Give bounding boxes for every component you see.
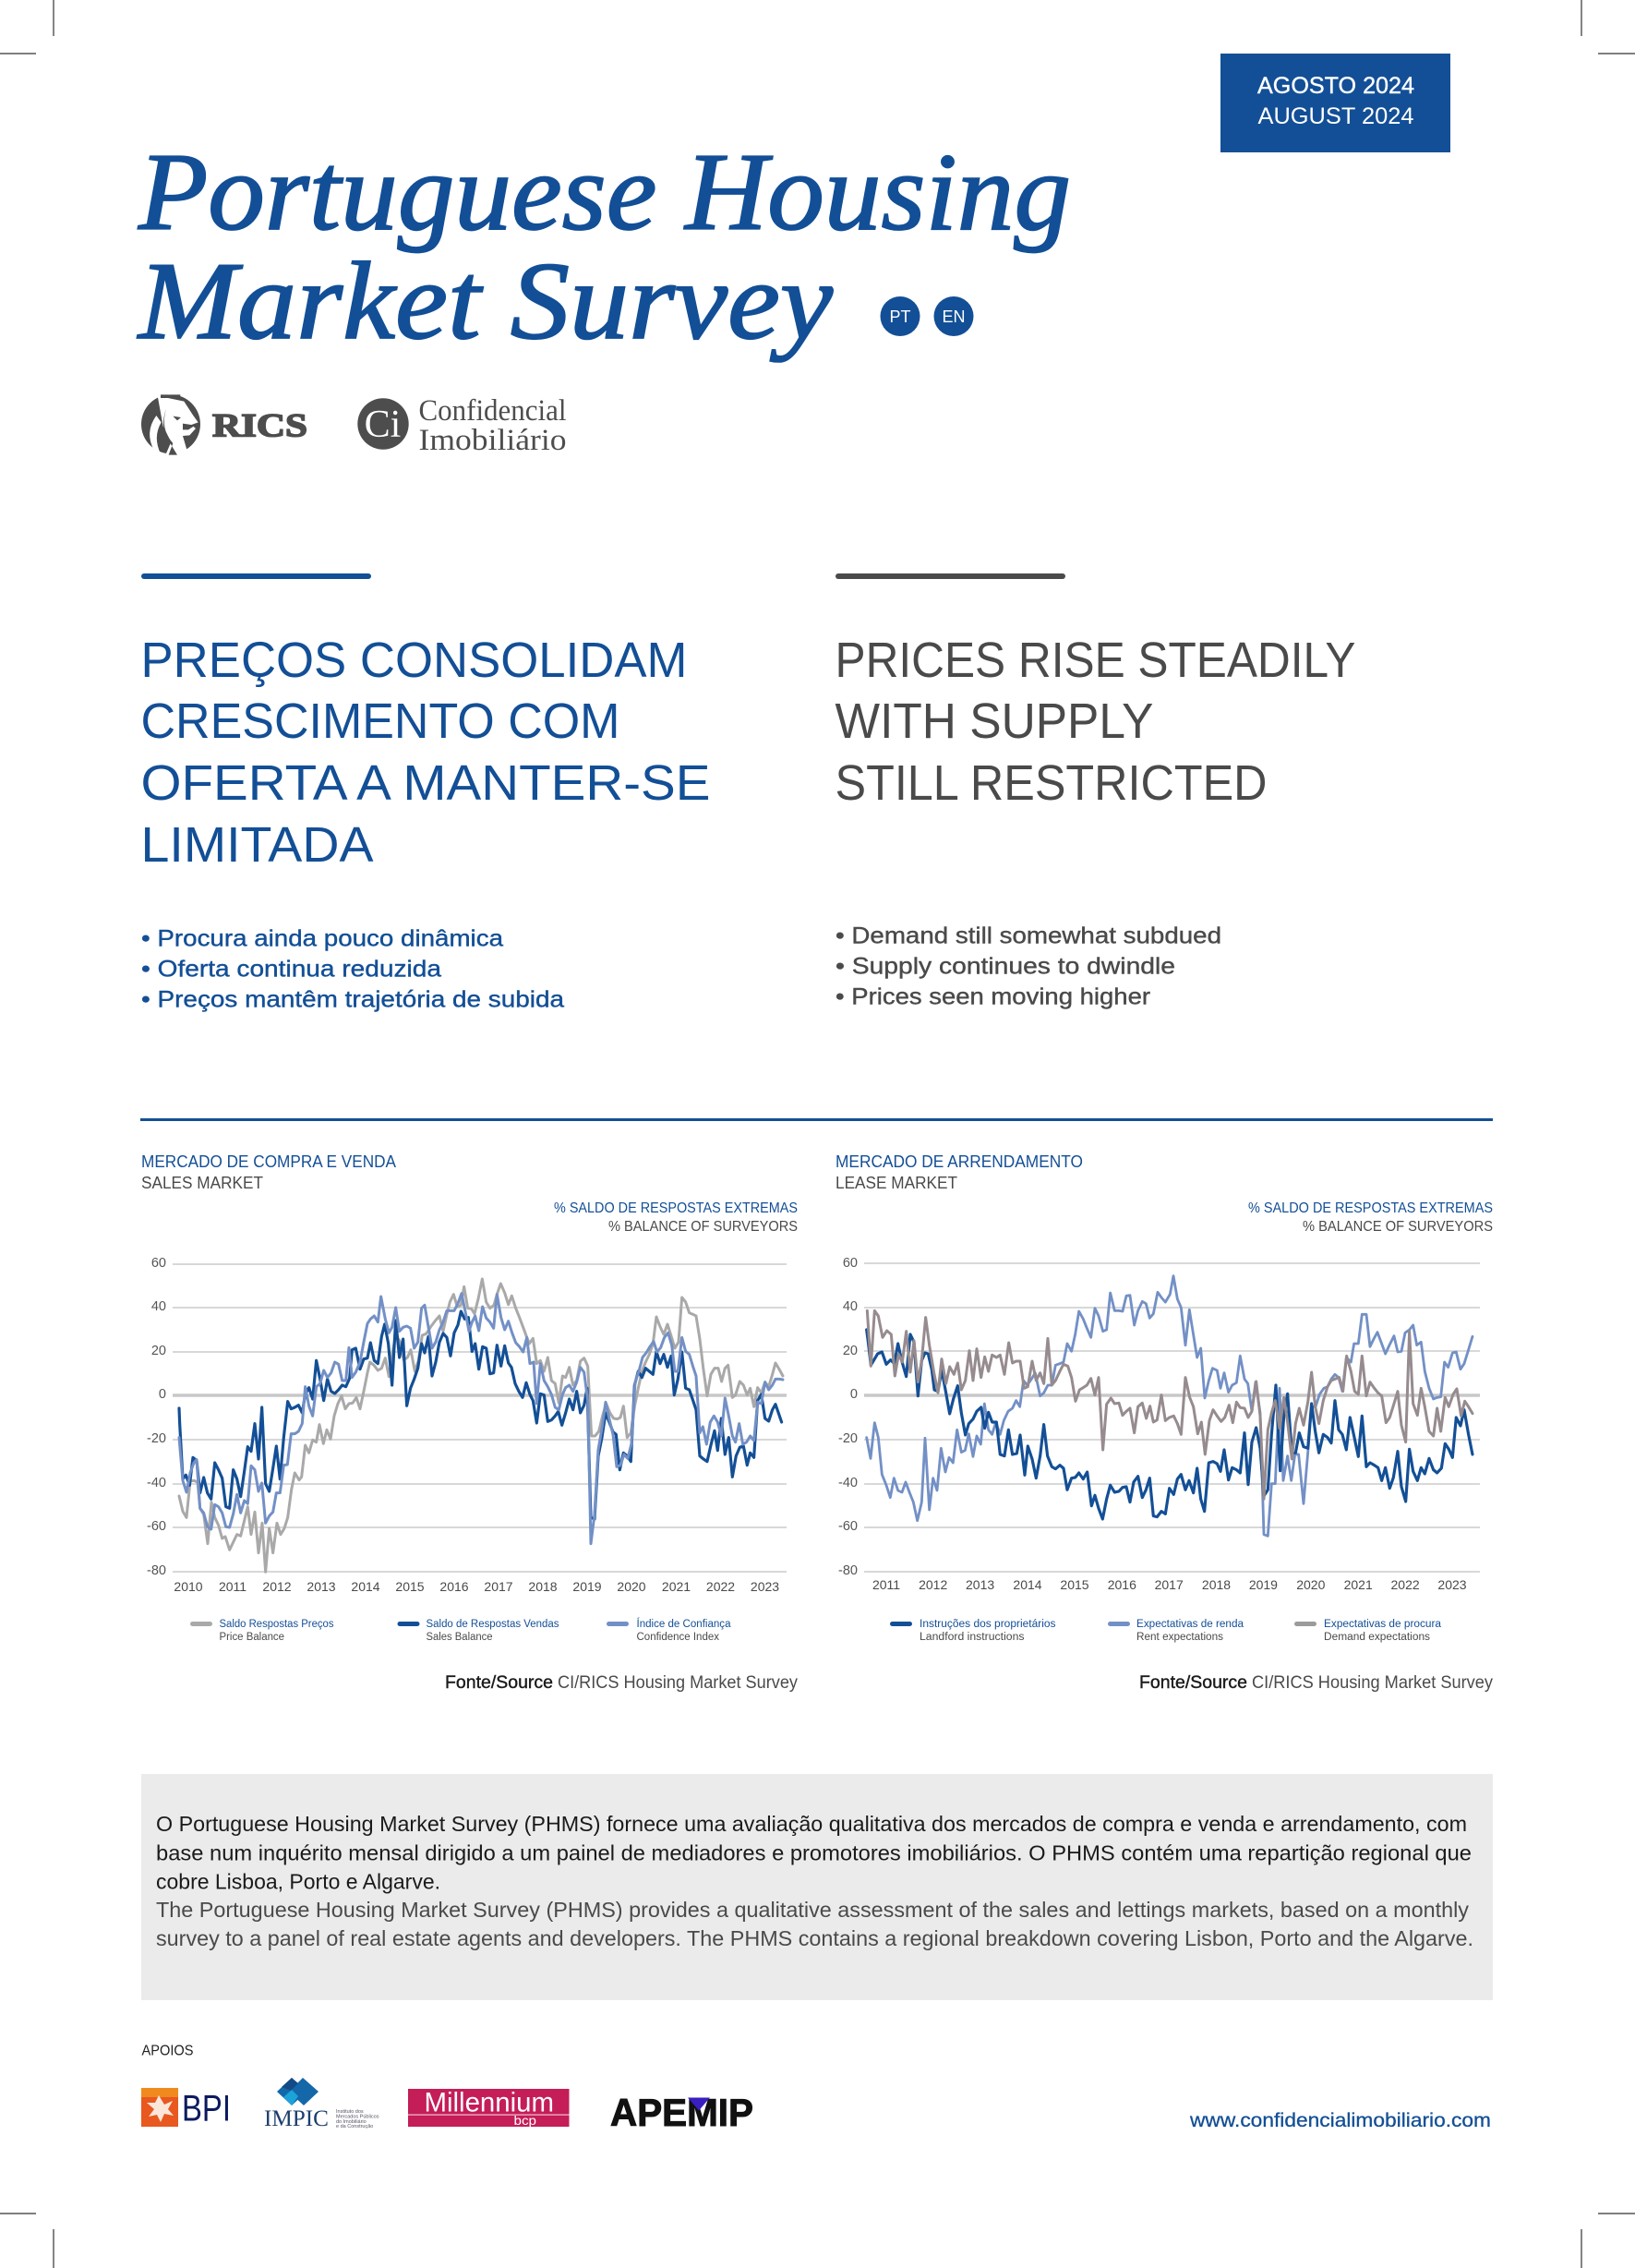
lease chart legend: Expectativas de renda xyxy=(1136,1619,1244,1630)
headline: English: PRICES RISE STEADILY xyxy=(835,633,1355,688)
lease chart source xyxy=(1139,1673,1493,1693)
date badge: AUGUST 2024 xyxy=(1257,103,1414,129)
sales chart legend: Sales Balance xyxy=(427,1632,493,1643)
sales chart legend xyxy=(190,1618,731,1643)
sales x axis labels: 2016 xyxy=(439,1579,469,1594)
headline: English: WITH SUPPLY xyxy=(835,694,1154,749)
logo: APEMIP: APEMIP xyxy=(610,2091,753,2134)
title: Market Survey xyxy=(137,239,834,362)
sales chart source: CI/RICS Housing Market Survey xyxy=(558,1673,798,1693)
logo: BPI: BPI xyxy=(182,2089,231,2129)
sales chart heading: MERCADO DE COMPRA E VENDA xyxy=(141,1152,396,1171)
lease chart legend: Landford instructions xyxy=(920,1632,1025,1643)
headline: Portuguese: OFERTA A MANTER-SE xyxy=(140,755,711,811)
logo: Confidencial Imobiliario xyxy=(357,394,567,457)
lease x axis labels: 2013 xyxy=(966,1577,994,1592)
sales chart unit note: % SALDO DE RESPOSTAS EXTREMAS xyxy=(554,1200,798,1216)
bullet list: English: • Supply continues to dwindle xyxy=(836,953,1175,979)
lease x axis labels: 2012 xyxy=(919,1577,947,1592)
sales y axis labels: -80 xyxy=(147,1563,166,1578)
sales chart legend: Índice de Confiança xyxy=(637,1618,731,1630)
bullet list: Portuguese: • Preços mantêm trajetória de subida xyxy=(141,986,564,1012)
logo: IMPIC: e da Construção xyxy=(336,2124,373,2129)
bullet list: Portuguese: • Procura ainda pouco dinâmica xyxy=(141,925,503,951)
sales y axis labels: 0 xyxy=(159,1387,166,1402)
lease y axis labels: 40 xyxy=(843,1299,858,1314)
lease x axis labels: 2011 xyxy=(872,1577,900,1592)
accent bar: Portuguese column xyxy=(141,573,371,579)
sales x axis labels: 2021 xyxy=(662,1579,691,1594)
sales chart source xyxy=(445,1673,798,1693)
lease y axis labels: 20 xyxy=(843,1344,858,1358)
headline: Portuguese: PREÇOS CONSOLIDAM xyxy=(140,633,687,688)
sales y axis labels: -40 xyxy=(147,1476,166,1490)
lease x axis labels: 2015 xyxy=(1060,1577,1089,1592)
logo: Confidencial Imobiliario: Confidencial xyxy=(419,394,567,428)
headline: Portuguese xyxy=(140,633,711,873)
lease chart legend: Instruções dos proprietários xyxy=(920,1619,1056,1630)
lease chart heading xyxy=(836,1152,1083,1192)
website url: www.confidencialimobiliario.com xyxy=(1189,2110,1491,2131)
sales x axis labels: 2017 xyxy=(484,1579,513,1594)
sales chart heading: SALES MARKET xyxy=(141,1174,263,1192)
logo: RICS: RICS xyxy=(212,406,307,443)
line: rent expectations xyxy=(867,1276,1473,1536)
logo: Confidencial Imobiliario: Ci xyxy=(365,404,401,446)
lease chart legend: Rent expectations xyxy=(1136,1632,1223,1643)
bullet list: Portuguese: • Oferta continua reduzida xyxy=(141,957,441,983)
sales chart unit note xyxy=(554,1200,798,1235)
lease chart unit note xyxy=(1248,1200,1493,1235)
sales x axis labels: 2012 xyxy=(262,1579,292,1594)
sales y axis labels xyxy=(147,1256,166,1578)
sales x axis labels xyxy=(174,1579,779,1594)
sales chart legend: Price Balance xyxy=(220,1632,284,1643)
lease y axis labels xyxy=(838,1256,858,1578)
description text: Portuguese xyxy=(156,1812,1472,1893)
sales y axis labels: -60 xyxy=(147,1519,166,1534)
sales x axis labels: 2022 xyxy=(706,1579,735,1594)
logo: IMPIC: IMPIC xyxy=(264,2106,329,2131)
lease chart source: Fonte/Source xyxy=(1139,1673,1247,1693)
lease x axis labels: 2018 xyxy=(1202,1577,1231,1592)
line: sales balance xyxy=(179,1311,782,1519)
date badge: AGOSTO 2024 xyxy=(1257,73,1414,99)
line: price balance xyxy=(179,1279,783,1572)
lease x axis labels: 2023 xyxy=(1437,1577,1467,1592)
description text: English: The Portuguese Housing Market Survey (PHMS) provides a qualitative assessment of the sales and lettings markets, based on a monthly xyxy=(156,1898,1470,1922)
description text: Portuguese: base num inquérito mensal dirigido a um painel de mediadores e promotores imobiliários. O PHMS contém uma repartição regional que xyxy=(156,1841,1472,1865)
sales chart legend: Saldo de Respostas Vendas xyxy=(427,1619,559,1630)
lease x axis labels: 2019 xyxy=(1249,1577,1278,1592)
sales chart heading xyxy=(141,1152,396,1192)
lease chart source: CI/RICS Housing Market Survey xyxy=(1252,1673,1493,1693)
lease y axis labels: -80 xyxy=(838,1563,858,1578)
sales x axis labels: 2010 xyxy=(174,1579,203,1594)
sales x axis labels: 2014 xyxy=(351,1579,380,1594)
lease y axis labels: 60 xyxy=(843,1256,858,1271)
lease x axis labels: 2020 xyxy=(1296,1577,1326,1592)
lease x axis labels: 2017 xyxy=(1155,1577,1184,1592)
sales x axis labels: 2019 xyxy=(572,1579,602,1594)
description text: English: survey to a panel of real estate agents and developers. The PHMS contains a regional breakdown covering Lisbon, Porto and the Algarve. xyxy=(156,1926,1473,1950)
lease chart heading: LEASE MARKET xyxy=(836,1174,957,1192)
lease chart heading: MERCADO DE ARRENDAMENTO xyxy=(836,1152,1083,1171)
lease y axis labels: -40 xyxy=(838,1476,858,1490)
language pills xyxy=(881,296,973,336)
line: landlord instructions xyxy=(867,1330,1473,1519)
title xyxy=(137,130,1071,362)
sales y axis labels: 20 xyxy=(151,1344,166,1358)
supporters label: APOIOS xyxy=(142,2043,194,2059)
logo: IMPIC xyxy=(264,2078,379,2131)
panel: description box xyxy=(141,1774,1493,2000)
lease x axis labels: 2014 xyxy=(1013,1577,1042,1592)
lease y axis labels: -60 xyxy=(838,1519,858,1534)
logo: Millennium bcp: bcp xyxy=(513,2113,536,2128)
headline: English xyxy=(835,633,1355,811)
lease x axis labels: 2021 xyxy=(1344,1577,1373,1592)
headline: English: STILL RESTRICTED xyxy=(835,755,1267,811)
bullet list: Portuguese xyxy=(141,925,564,1012)
sales y axis labels: 40 xyxy=(151,1299,166,1314)
lease y axis labels: 0 xyxy=(850,1387,858,1402)
logo: IMPIC: Mercados Públicos xyxy=(336,2115,379,2120)
sales x axis labels: 2013 xyxy=(307,1579,336,1594)
logo: IMPIC: do Imobiliário xyxy=(336,2119,367,2125)
sales x axis labels: 2011 xyxy=(219,1579,246,1594)
logo: Millennium bcp: Millennium xyxy=(425,2087,554,2118)
bullet list: English: • Prices seen moving higher xyxy=(836,984,1150,1010)
panel: sales market chart xyxy=(141,1152,798,1693)
lease x axis labels: 2022 xyxy=(1391,1577,1420,1592)
sales y axis labels: -20 xyxy=(147,1431,166,1446)
lease chart legend xyxy=(890,1619,1442,1643)
sales x axis labels: 2015 xyxy=(395,1579,425,1594)
line: demand expectations xyxy=(867,1310,1473,1499)
logo: BPI xyxy=(141,2088,231,2129)
sales y axis labels: 60 xyxy=(151,1256,166,1271)
logo: IMPIC: Instituto dos xyxy=(336,2109,364,2115)
lease chart unit note: % BALANCE OF SURVEYORS xyxy=(1303,1219,1493,1235)
lease chart unit note: % SALDO DE RESPOSTAS EXTREMAS xyxy=(1248,1200,1493,1216)
sales chart legend: Confidence Index xyxy=(637,1632,719,1643)
sales chart source: Fonte/Source xyxy=(445,1673,553,1693)
logo: RICS xyxy=(141,394,307,455)
lease chart legend: Demand expectations xyxy=(1324,1632,1430,1643)
sales x axis labels: 2018 xyxy=(528,1579,558,1594)
logo: Confidencial Imobiliario: Imobiliário xyxy=(419,424,567,457)
accent bar: English column xyxy=(836,573,1065,579)
sales chart unit note: % BALANCE OF SURVEYORS xyxy=(608,1219,798,1235)
sales x axis labels: 2023 xyxy=(751,1579,779,1594)
lease chart legend: Expectativas de procura xyxy=(1324,1619,1442,1630)
sales chart legend: Saldo Respostas Preços xyxy=(220,1619,334,1630)
description text: English xyxy=(156,1898,1473,1950)
line: confidence index xyxy=(179,1294,783,1544)
title: Portuguese Housing xyxy=(138,130,1071,253)
description text: Portuguese: cobre Lisboa, Porto e Algarve. xyxy=(156,1869,440,1893)
panel: lease market chart xyxy=(836,1152,1493,1693)
logo: Millennium bcp xyxy=(408,2087,569,2128)
lease x axis labels: 2016 xyxy=(1108,1577,1136,1592)
lease x axis labels xyxy=(872,1577,1467,1592)
bullet list: English xyxy=(836,923,1221,1010)
bullet list: English: • Demand still somewhat subdued xyxy=(836,923,1221,949)
description text: Portuguese: O Portuguese Housing Market Survey (PHMS) fornece uma avaliação qualitativa dos mercados de compra e venda e arrendamento, com xyxy=(156,1812,1467,1836)
sales x axis labels: 2020 xyxy=(617,1579,646,1594)
lease y axis labels: -20 xyxy=(838,1431,858,1446)
headline: Portuguese: LIMITADA xyxy=(140,817,373,873)
language pills: PT xyxy=(889,308,911,326)
date badge xyxy=(1220,54,1450,152)
language pills: EN xyxy=(942,308,966,326)
headline: Portuguese: CRESCIMENTO COM xyxy=(140,694,620,749)
